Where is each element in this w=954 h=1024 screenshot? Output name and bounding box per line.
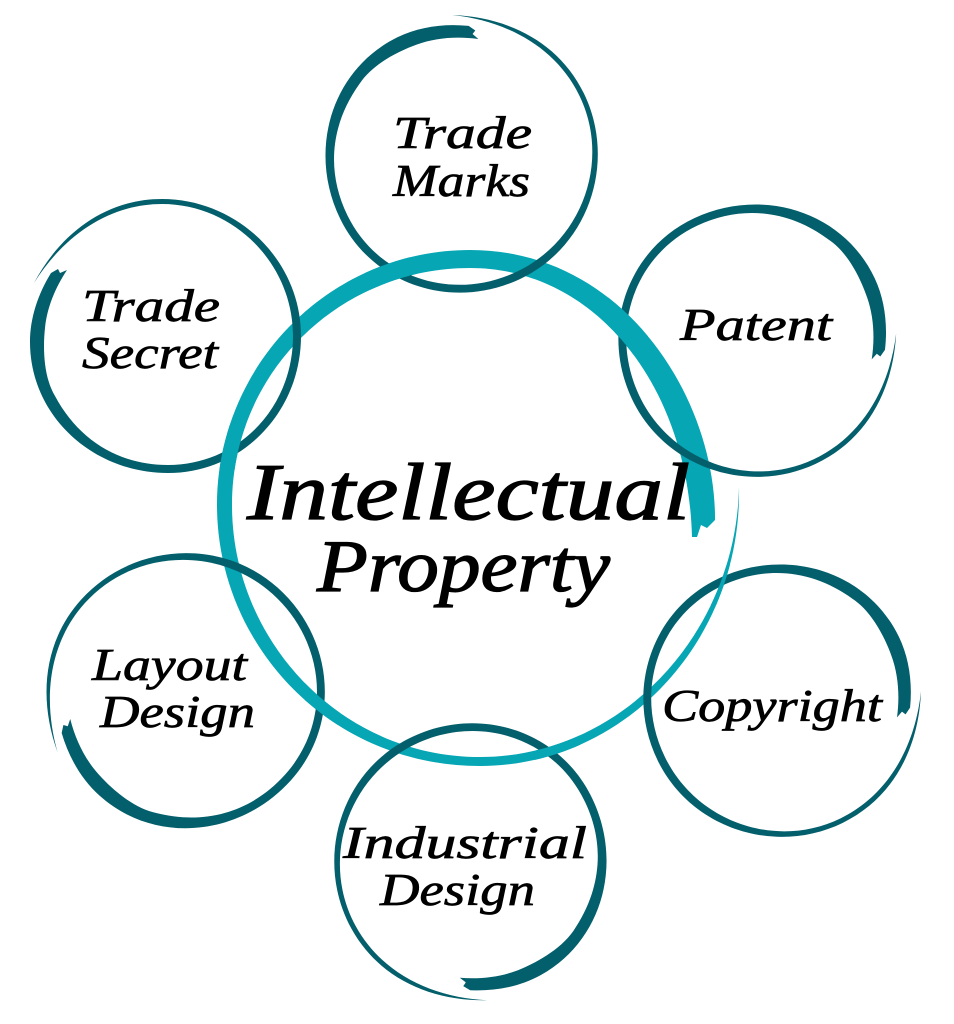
label: trade secret: Trade [82, 281, 220, 331]
central ring: intellectual property [217, 250, 739, 766]
label: trade marks: Trade [393, 108, 532, 158]
label: industrial design: Design [379, 865, 535, 915]
circle: industrial design [284, 675, 655, 1024]
circle: patent [574, 160, 935, 523]
circle: trade marks [280, 0, 645, 338]
circle: copyright [598, 519, 954, 884]
title: intellectual property [246, 449, 690, 608]
label: industrial design: Industrial [342, 818, 587, 868]
label: trade secret: Secret [82, 328, 220, 378]
title: intellectual property: Property [316, 526, 610, 608]
label: layout design: Layout [91, 640, 249, 690]
label: copyright: Copyright [662, 681, 884, 731]
circle: trade secret [30, 199, 301, 473]
central ring overlaps woven above the circles [217, 250, 739, 766]
label: layout design [91, 640, 255, 737]
circle: layout design [0, 495, 381, 884]
label: patent: Patent [679, 300, 834, 350]
label: industrial design [342, 818, 587, 915]
label: trade marks [392, 108, 532, 206]
label: trade marks: Marks [392, 156, 530, 206]
label: layout design: Design [99, 687, 255, 737]
title: intellectual property: Intellectual [246, 449, 690, 537]
label: trade secret [82, 281, 220, 378]
